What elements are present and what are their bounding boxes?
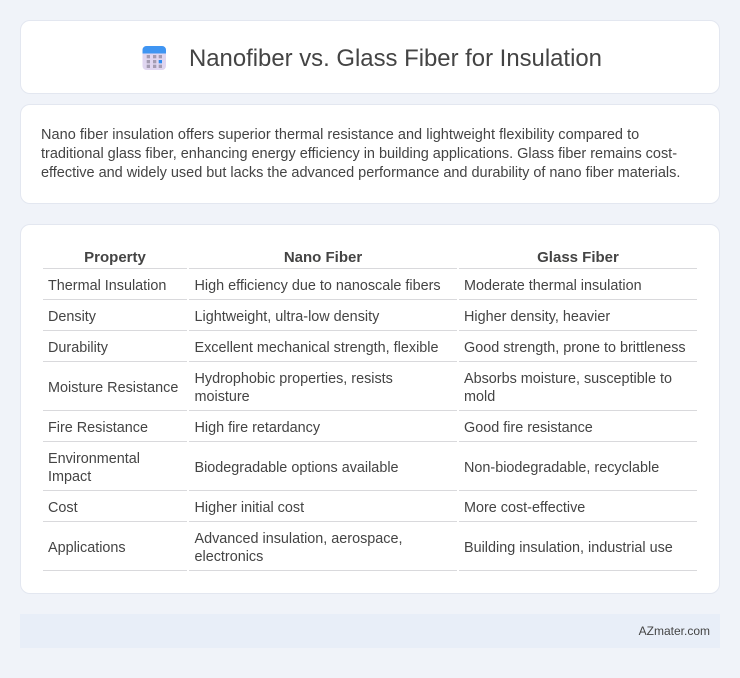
- panel: comparison table: [20, 224, 720, 594]
- table: More cost-effective: [464, 500, 585, 516]
- table: mold: [464, 389, 495, 405]
- table: [43, 249, 697, 571]
- table: Higher initial cost: [194, 500, 304, 516]
- footer credit: AZmater.com: [639, 624, 710, 638]
- intro text: Nano fiber insulation offers superior thermal resistance and lightweight flexibility compared to: [41, 127, 639, 143]
- row: Environmental Impact: Impact: [48, 469, 91, 485]
- table: electronics: [194, 549, 263, 565]
- header: Property: Property: [84, 249, 146, 266]
- table: High efficiency due to nanoscale fibers: [194, 278, 441, 294]
- row: Moisture Resistance: Moisture Resistance: [48, 380, 178, 396]
- intro text: effective and widely used but lacks the advanced performance and durability of nano fiber materials.: [41, 165, 680, 181]
- row: Density: Density: [48, 309, 96, 325]
- row: Fire Resistance: Fire Resistance: [48, 420, 148, 436]
- table: Absorbs moisture, susceptible to: [464, 371, 672, 387]
- table: Excellent mechanical strength, flexible: [194, 340, 438, 356]
- table: moisture: [194, 389, 250, 405]
- row: Environmental Impact: Environmental: [48, 451, 140, 467]
- table: Lightweight, ultra-low density: [194, 309, 379, 325]
- row: Cost: Cost: [48, 500, 78, 516]
- table: Good fire resistance: [464, 420, 593, 436]
- table: Biodegradable options available: [194, 460, 399, 476]
- title: Nanofiber vs. Glass Fiber for Insulation: [189, 45, 602, 72]
- row: Durability: Durability: [48, 340, 108, 356]
- row: Environmental Impact: [48, 451, 140, 485]
- row: Thermal Insulation: Thermal Insulation: [48, 278, 166, 294]
- table: Advanced insulation, aerospace,: [194, 531, 403, 547]
- icon: calendar: [142, 46, 166, 70]
- intro text: [41, 127, 680, 181]
- intro text: traditional glass fiber, enhancing energy efficiency in building applications. Glass fiber remains cost-: [41, 146, 677, 162]
- table: Hydrophobic properties, resists: [194, 371, 393, 387]
- header: Nano Fiber: Nano Fiber: [284, 249, 362, 266]
- panel: title card: [20, 20, 720, 94]
- header: Glass Fiber: Glass Fiber: [537, 249, 619, 266]
- row: Applications: Applications: [48, 540, 126, 556]
- footer bar: [20, 614, 720, 648]
- table: Building insulation, industrial use: [464, 540, 673, 556]
- table: Good strength, prone to brittleness: [464, 340, 686, 356]
- panel: introduction: [20, 104, 720, 204]
- table: Higher density, heavier: [464, 309, 610, 325]
- table: Non-biodegradable, recyclable: [464, 460, 659, 476]
- table: Moderate thermal insulation: [464, 278, 642, 294]
- table: High fire retardancy: [194, 420, 320, 436]
